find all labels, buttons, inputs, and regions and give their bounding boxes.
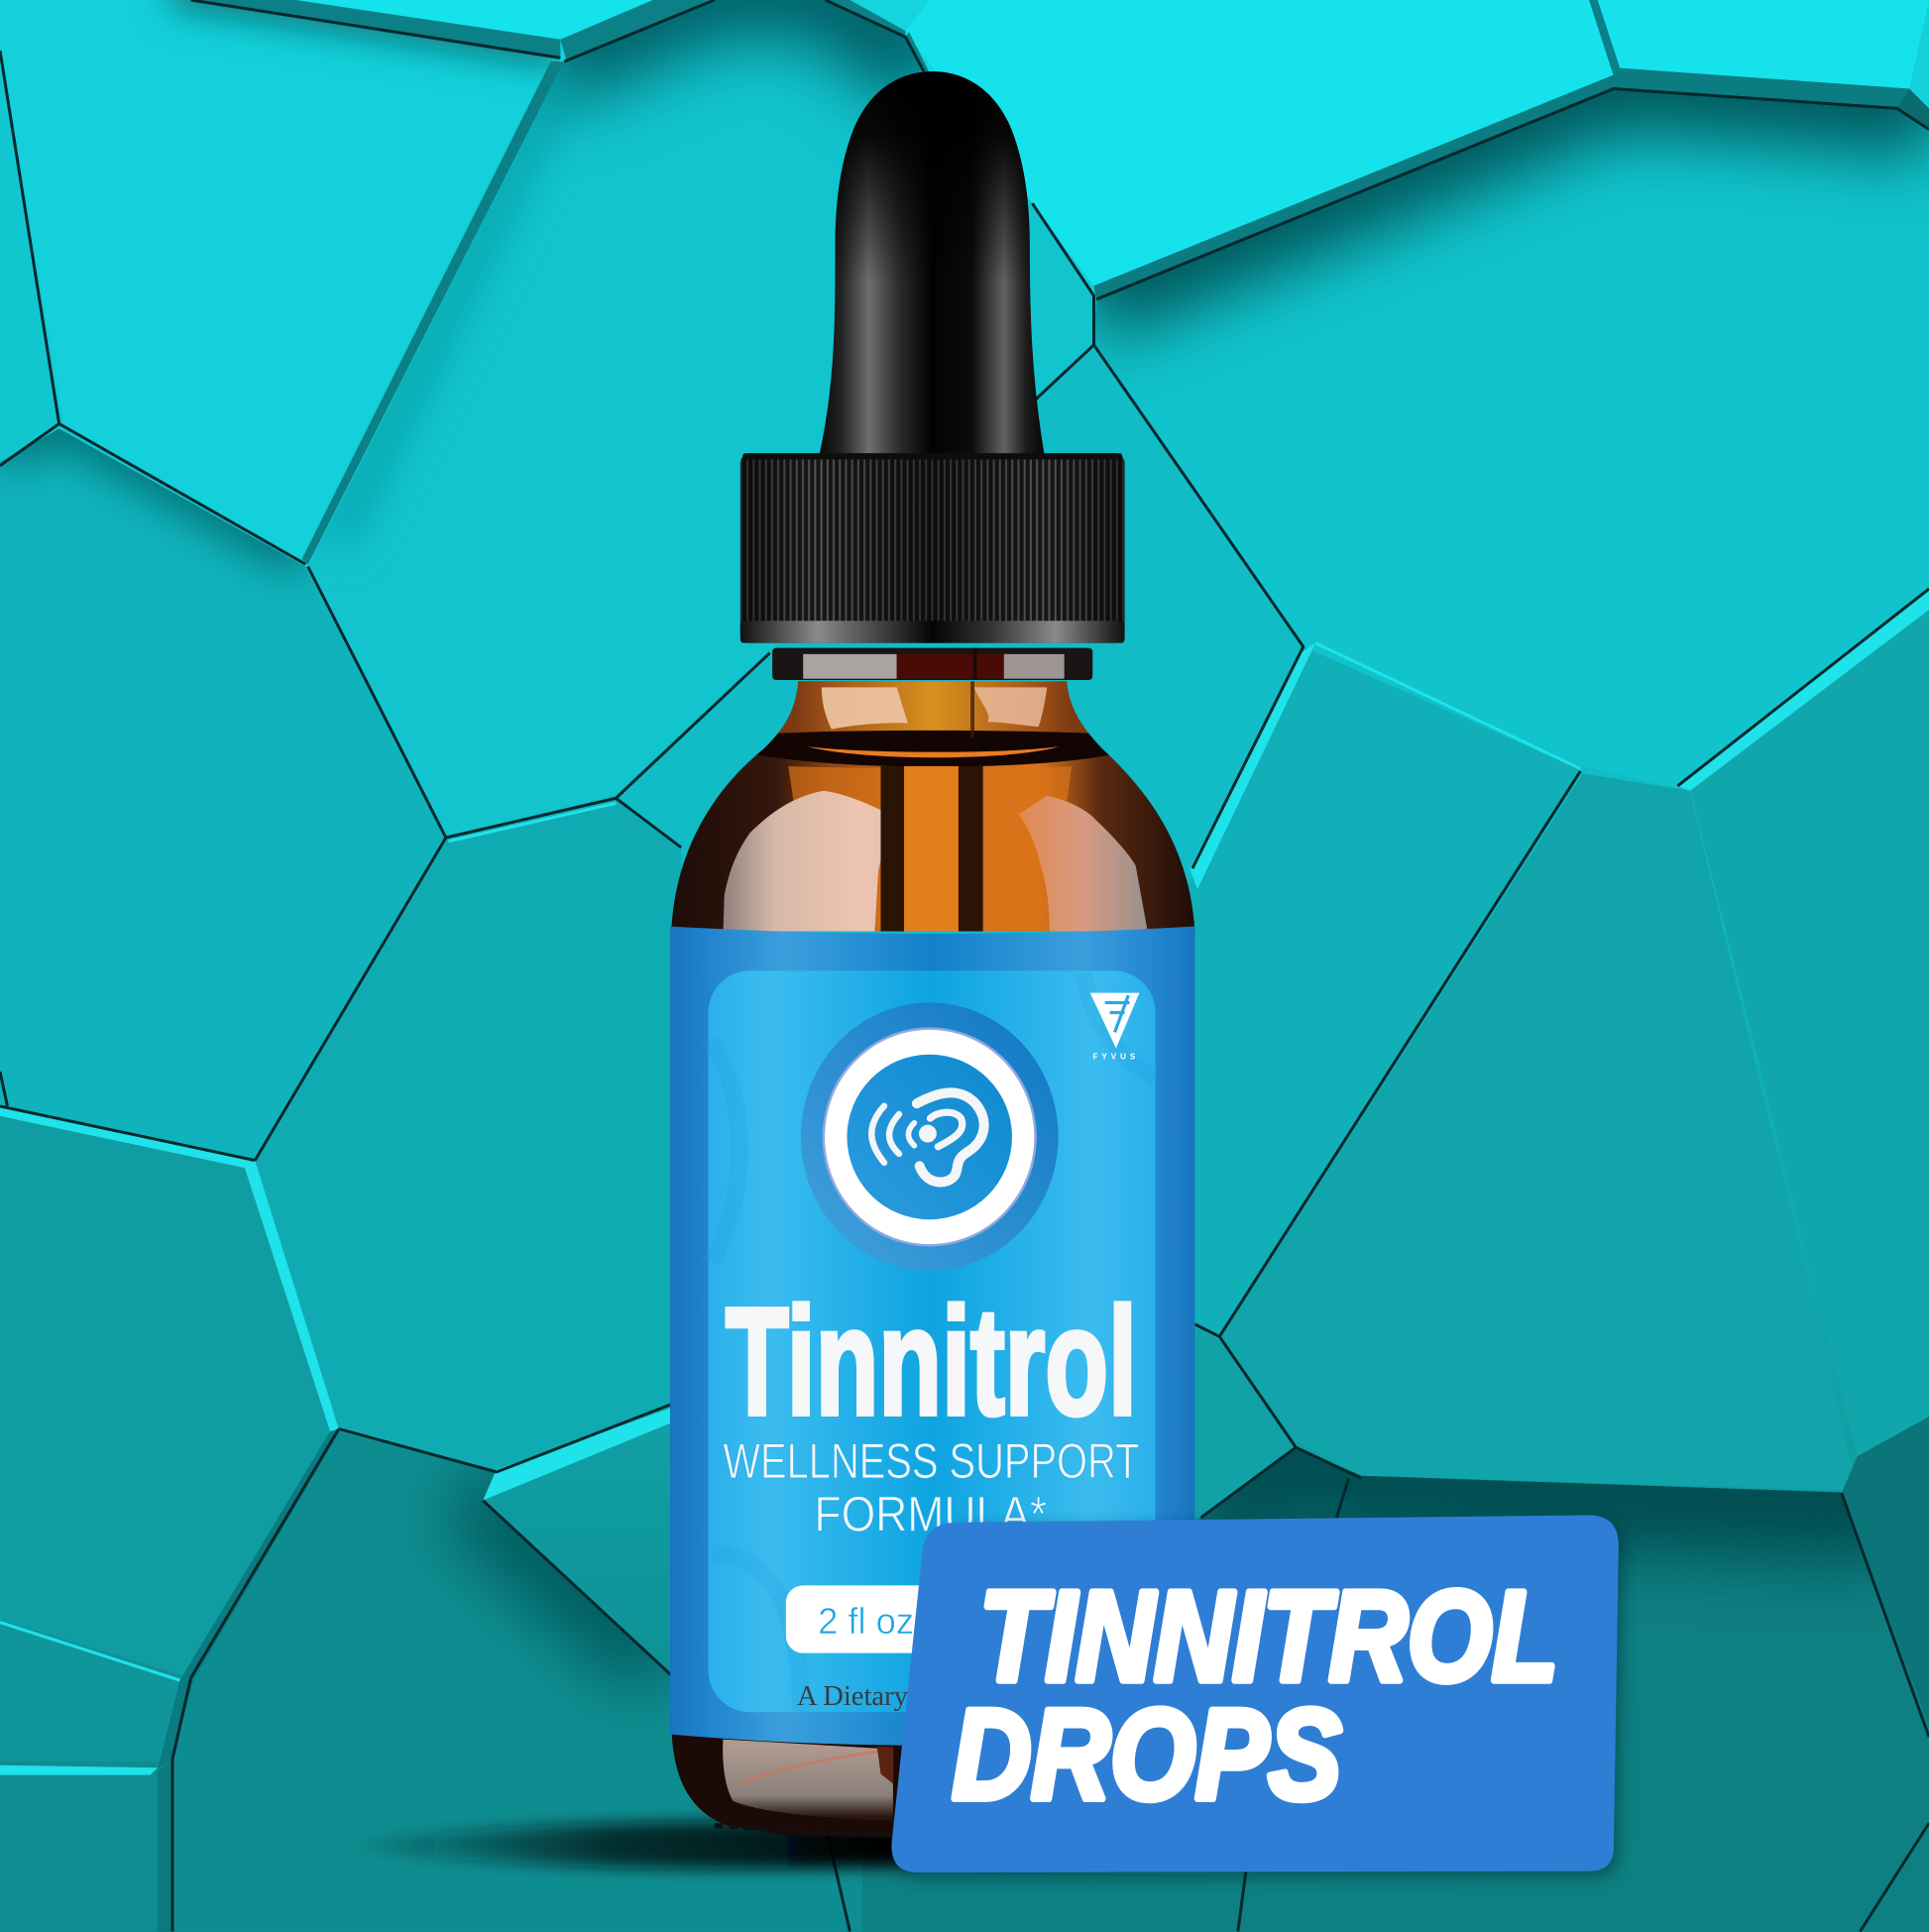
facet: large flat panel xyxy=(1219,773,1858,1491)
neck highlights xyxy=(822,687,908,730)
facet: bottom centre shaded panel xyxy=(161,1417,899,1932)
brand logo xyxy=(1090,993,1139,1062)
brand logo: FYVUS xyxy=(1092,1053,1139,1062)
neck ring xyxy=(772,648,1092,680)
dark liquid line xyxy=(754,731,1115,767)
facet: far right panel xyxy=(1690,604,1929,1456)
bottle shadow on wall xyxy=(333,1821,912,1870)
card title line 1: TINNITROL xyxy=(979,1565,1558,1708)
facet: dark lower right area xyxy=(838,1441,1929,1932)
card title line 2: DROPS xyxy=(953,1683,1341,1826)
facet: top notch xyxy=(850,0,930,31)
inner glass tone xyxy=(788,766,1072,934)
facet: top right bevels xyxy=(1093,74,1616,299)
facet: far left panel xyxy=(0,56,59,462)
facet: top left bright panel xyxy=(0,0,560,563)
facet: top centre bright panel xyxy=(905,0,1616,289)
volume pill xyxy=(786,1585,1081,1653)
icon: ear with sound waves xyxy=(871,1092,984,1183)
amber neck xyxy=(776,681,1090,738)
supplement note: A Dietary xyxy=(797,1681,909,1712)
facet: centre left shaded panel xyxy=(295,0,1108,850)
facet: left middle panel xyxy=(0,416,456,1171)
ear emblem xyxy=(801,1002,1059,1271)
amber glass shoulder and neck xyxy=(671,681,1194,934)
left highlight xyxy=(724,791,880,932)
facet: small panel right of label xyxy=(1189,1336,1294,1518)
facet: top left bevels xyxy=(191,0,931,564)
bottle base xyxy=(671,1725,1194,1838)
facet: lower left panel xyxy=(0,1106,339,1678)
facet: behind-cap diamond panel xyxy=(616,345,1304,985)
product subtitle line 2: FORMULA* xyxy=(814,1487,1047,1542)
dropper bottle xyxy=(670,71,1624,1879)
card shadow xyxy=(896,1520,1624,1879)
facet: centre lower panel xyxy=(255,801,690,1470)
label inner panel xyxy=(709,970,1156,1712)
blue title card xyxy=(891,1515,1624,1879)
facet: dark edge bevels xyxy=(158,1428,341,1768)
facet: bright cyan bevels xyxy=(0,591,1929,1775)
neck seams xyxy=(970,681,974,738)
ribbed black cap xyxy=(740,453,1125,643)
blue product label xyxy=(670,926,1194,1746)
facet: top left soft shadow xyxy=(172,0,560,45)
facet: top edge sliver xyxy=(295,0,653,40)
volume pill: 2 fl oz xyxy=(818,1600,914,1642)
label decorative rings xyxy=(711,973,1156,1712)
facet: bottom left panels xyxy=(0,1620,187,1762)
facet: top right bright panel xyxy=(1589,0,1929,88)
product subtitle line 1: WELLNESS SUPPORT xyxy=(723,1433,1139,1489)
card shape xyxy=(891,1515,1619,1873)
facet: right large shaded panel xyxy=(1095,86,1929,404)
dropper tube xyxy=(880,766,904,934)
facet: right of bottle panel xyxy=(1183,646,1580,1336)
dropper bulb xyxy=(819,71,1045,456)
facet: right lower wedge xyxy=(1842,1417,1929,1725)
product name: Tinnitrol xyxy=(726,1277,1137,1447)
right highlight xyxy=(1019,796,1148,934)
